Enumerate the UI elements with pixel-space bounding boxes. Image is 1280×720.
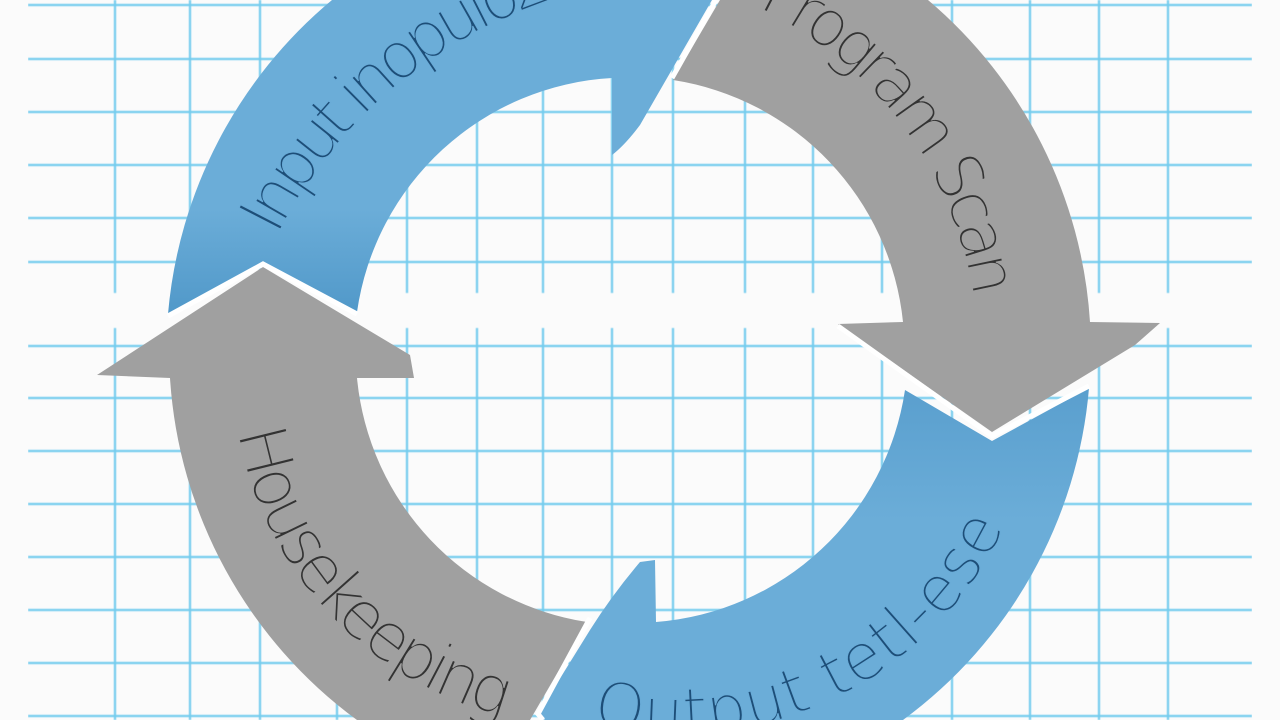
arrow: input scan [168, 0, 712, 313]
arrow: output [541, 388, 1089, 720]
arrow: program scan [673, 0, 1160, 432]
arrow: housekeeping [97, 267, 586, 720]
